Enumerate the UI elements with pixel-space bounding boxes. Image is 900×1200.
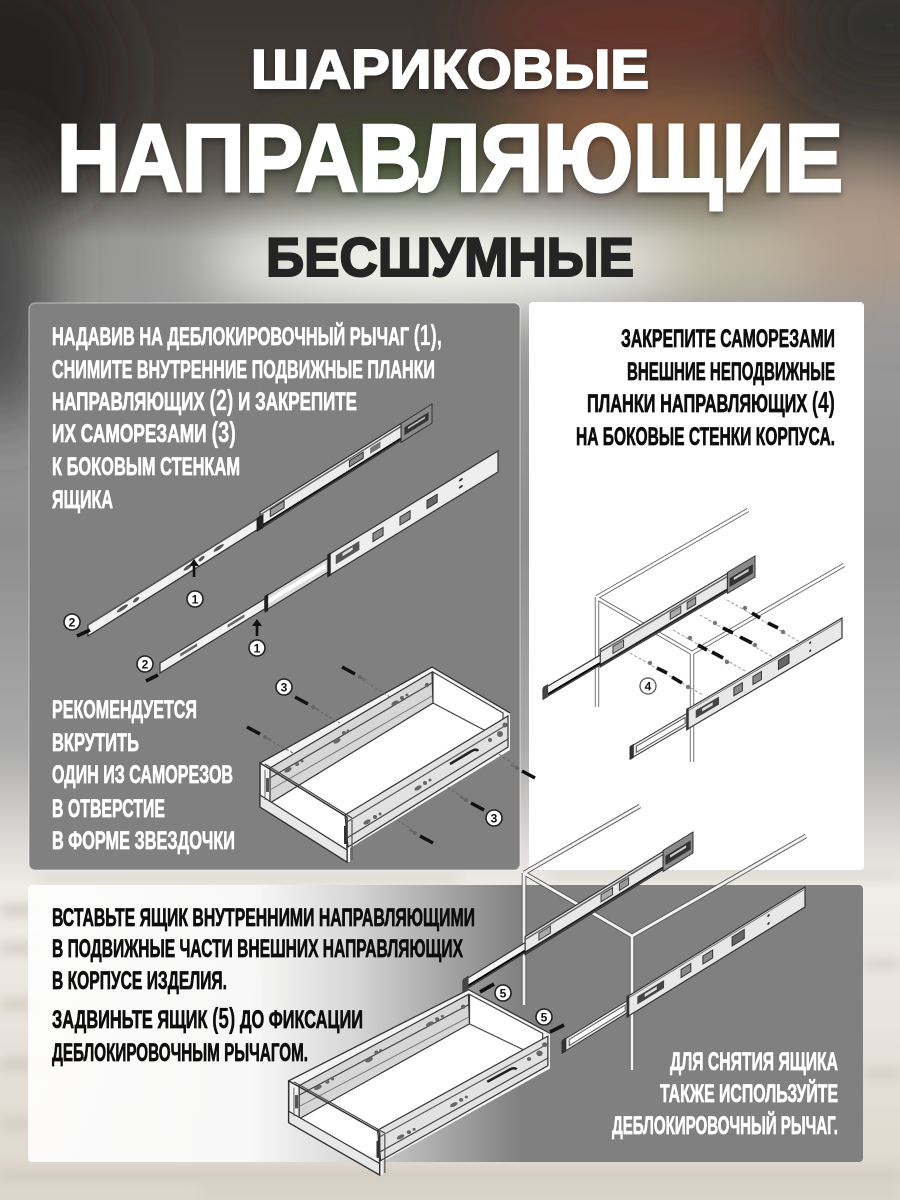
illustration: inner rail with lever xyxy=(88,404,432,639)
text: insertion instructions: ВСТАВЬТЕ ЯЩИК ВНУТРЕННИМИ НАПРАВЛЯЮЩИМИ xyxy=(52,904,475,932)
panel: insert drawer xyxy=(28,885,863,1162)
text: lever instructions: НАПРАВЛЯЮЩИХ (2) И ЗАКРЕПИТЕ xyxy=(52,385,357,417)
text: lever instructions: СНИМИТЕ ВНУТРЕННИЕ ПОДВИЖНЫЕ ПЛАНКИ xyxy=(52,356,435,384)
callouts: 3: 3 xyxy=(281,680,288,694)
markers: callouts 1 and 2 with arrows: 2 xyxy=(69,616,76,630)
text: lever instructions: К БОКОВЫМ СТЕНКАМ xyxy=(52,453,240,481)
title xyxy=(57,38,843,288)
text: insertion instructions xyxy=(52,904,475,1067)
callouts: 3: 3 xyxy=(491,812,498,826)
text: screw recommendation: ОДИН ИЗ САМОРЕЗОВ xyxy=(52,761,233,789)
text: removal note xyxy=(612,1048,838,1140)
text: screw recommendation: В ФОРМЕ ЗВЕЗДОЧКИ xyxy=(52,827,235,855)
illustration: assembled lower rail xyxy=(160,450,498,680)
markers: callouts 1 and 2 with arrows: 1 xyxy=(192,592,199,606)
title line: napravlyayushchie: НАПРАВЛЯЮЩИЕ xyxy=(57,105,843,212)
text: lever instructions xyxy=(52,320,442,514)
illustration: outer rail lower xyxy=(630,617,842,764)
text: insertion instructions: В ПОДВИЖНЫЕ ЧАСТИ ВНЕШНИХ НАПРАВЛЯЮЩИХ xyxy=(52,935,463,963)
illustration: drawer with screws xyxy=(247,667,535,862)
callouts: 5: 5 xyxy=(500,986,507,1000)
text: lever instructions: ЯЩИКА xyxy=(52,486,113,514)
panel: fix outer rails xyxy=(529,302,864,870)
text: insertion instructions: ЗАДВИНЬТЕ ЯЩИК (5) ДО ФИКСАЦИИ xyxy=(52,1003,363,1035)
cabinet outline xyxy=(524,806,806,1070)
callout: 4 xyxy=(640,678,656,694)
text: lever instructions: НАДАВИВ НА ДЕБЛОКИРОВОЧНЫЙ РЫЧАГ (1), xyxy=(52,320,442,352)
callouts: 3 xyxy=(276,679,502,826)
subtitle: besshumnye: БЕСШУМНЫЕ xyxy=(266,226,634,288)
markers: callouts 1 and 2 with arrows xyxy=(64,559,265,681)
markers: callouts 1 and 2 with arrows: 2 xyxy=(142,658,149,672)
text: lever instructions: ИХ САМОРЕЗАМИ (3) xyxy=(52,417,236,449)
markers: callouts 1 and 2 with arrows: 1 xyxy=(254,642,261,656)
panel: remove inner rails xyxy=(29,303,520,870)
lower rail in cabinet xyxy=(562,886,805,1058)
text: outer rail instructions xyxy=(576,325,835,451)
title line: sharikovye: ШАРИКОВЫЕ xyxy=(251,38,649,100)
illustration: cabinet and drawer insertion xyxy=(289,806,806,1175)
callout: 4: 4 xyxy=(645,680,652,694)
text: insertion instructions: ДЕБЛОКИРОВОЧНЫМ РЫЧАГОМ. xyxy=(52,1039,308,1067)
text: screw recommendation: ВКРУТИТЬ xyxy=(52,729,139,757)
text: screw recommendation: В ОТВЕРСТИЕ xyxy=(52,795,165,823)
text: screw recommendation xyxy=(52,696,235,855)
drawer being inserted xyxy=(289,990,550,1175)
text: screw recommendation: РЕКОМЕНДУЕТСЯ xyxy=(52,696,197,724)
rail in cabinet xyxy=(463,832,693,995)
callouts: 5 xyxy=(480,984,564,1032)
callouts: 5: 5 xyxy=(541,1010,548,1024)
illustration: outer rail upper xyxy=(543,556,755,703)
text: insertion instructions: В КОРПУСЕ ИЗДЕЛИЯ. xyxy=(52,967,227,995)
illustration: screw guides xyxy=(630,600,800,695)
illustration: cabinet outline xyxy=(597,510,844,762)
